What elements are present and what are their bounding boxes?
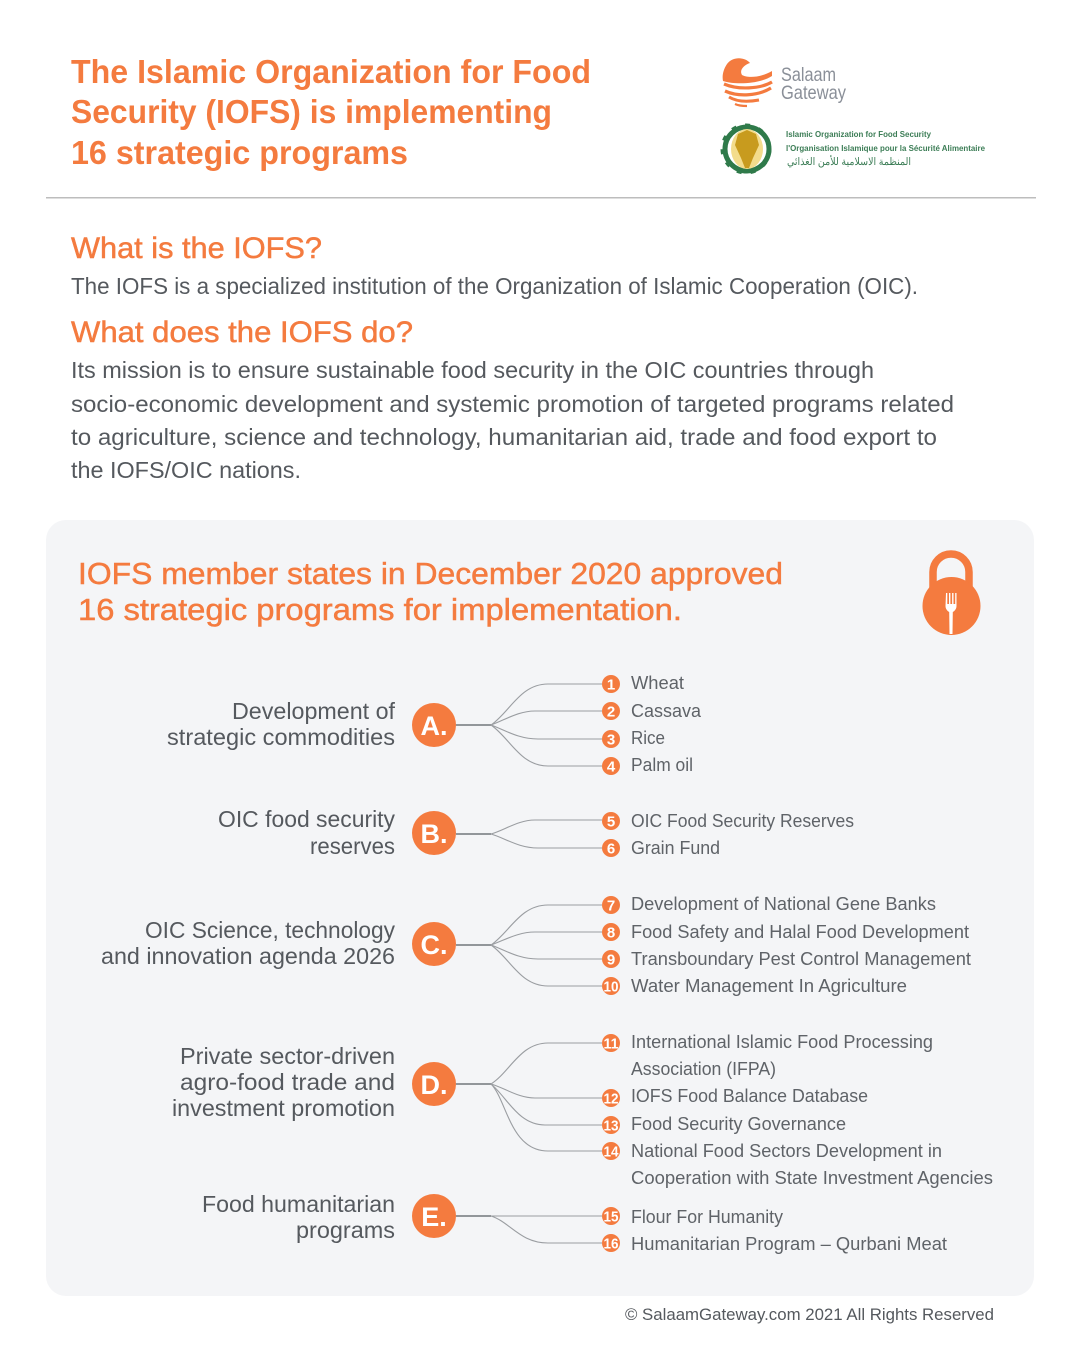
title: 16 strategic programs	[71, 134, 408, 171]
label D: Private sector-driven	[180, 1043, 395, 1069]
group E: food humanitarian programs	[202, 1191, 947, 1254]
label C: and innovation agenda 2026	[101, 943, 395, 969]
items C	[602, 893, 971, 996]
items B: Grain Fund	[631, 837, 720, 858]
badge A	[412, 703, 456, 747]
items E: 15	[604, 1208, 618, 1226]
items C: Transboundary Pest Control Management	[631, 948, 971, 969]
panel heading: IOFS member states in December 2020 approved	[78, 556, 783, 591]
items D: IOFS Food Balance Database	[631, 1085, 868, 1106]
label B: reserves	[310, 833, 395, 859]
items A	[602, 672, 702, 776]
text block: IOFS mission	[71, 357, 954, 483]
badge B	[412, 811, 456, 855]
text block: IOFS mission: to agriculture, science and technology, humanitarian aid, trade and food export to	[71, 424, 937, 450]
label A: strategic commodities	[167, 724, 395, 750]
icon: padlock with fork	[922, 554, 980, 635]
items A: Rice	[631, 727, 665, 748]
label A: Development of	[232, 698, 396, 724]
label D	[172, 1043, 395, 1121]
connectors D	[456, 1043, 602, 1151]
logo: Islamic Organization for Food Security	[722, 125, 985, 173]
label D: agro-food trade and	[180, 1069, 395, 1095]
heading: What does the IOFS do?: What does the IOFS do?	[71, 316, 413, 349]
items C: 9	[607, 952, 615, 968]
panel heading: 16 strategic programs for implementation.	[78, 592, 682, 627]
label D: investment promotion	[172, 1095, 395, 1121]
group D: agro-food trade and investment	[172, 1031, 993, 1188]
items C: 8	[607, 924, 615, 942]
label C: OIC Science, technology	[145, 917, 395, 943]
badge E: E.	[421, 1202, 447, 1232]
items E: Flour For Humanity	[631, 1206, 784, 1227]
text block: IOFS mission: Its mission is to ensure sustainable food security in the OIC countries through	[71, 357, 874, 383]
badge D: D.	[420, 1070, 448, 1100]
label C	[101, 917, 395, 969]
items A: 2	[607, 704, 615, 720]
logo: Islamic Organization for Food Security: l'Organisation Islamique pour la Sécurité Alimentaire	[786, 143, 985, 153]
connectors E	[456, 1216, 602, 1243]
label E	[202, 1191, 395, 1243]
logo: Salaam Gateway	[723, 58, 846, 106]
items C: 7	[607, 898, 615, 914]
logo: Islamic Organization for Food Security: المنظمة الاسلامية للأمن الغذائي	[787, 154, 911, 168]
text block: IOFS mission: the IOFS/OIC nations.	[71, 457, 301, 483]
items A: Wheat	[631, 672, 684, 693]
connectors B	[456, 820, 602, 848]
label B	[218, 806, 395, 859]
badge C	[412, 922, 456, 966]
panel: strategic programs	[46, 520, 1034, 1296]
badge E	[412, 1194, 456, 1238]
items A: 1	[607, 676, 615, 694]
items D	[602, 1031, 993, 1188]
items D: 14	[604, 1144, 619, 1160]
items D: Association (IFPA)	[631, 1058, 776, 1079]
badge B: B.	[420, 819, 448, 849]
items B	[602, 810, 854, 858]
items D: National Food Sectors Development in	[631, 1140, 942, 1161]
items E: 16	[604, 1236, 618, 1252]
label A	[167, 698, 396, 750]
items A: Palm oil	[631, 754, 693, 775]
group A: strategic commodities	[167, 672, 702, 776]
items A: 3	[607, 732, 615, 748]
label E: programs	[296, 1217, 395, 1243]
logo: Islamic Organization for Food Security: Islamic Organization for Food Security	[786, 129, 931, 139]
badge C: C.	[420, 930, 448, 960]
connectors C	[456, 905, 602, 986]
badge D	[412, 1062, 456, 1106]
label B: OIC food security	[218, 806, 395, 832]
items E	[602, 1206, 947, 1254]
divider	[46, 197, 1036, 198]
items D: 12	[604, 1090, 618, 1108]
text block: IOFS definition: The IOFS is a specialized institution of the Organization of Islamic Cooperation (OIC).	[71, 273, 918, 299]
label E: Food humanitarian	[202, 1191, 395, 1217]
text block: IOFS mission: socio-economic development and systemic promotion of targeted programs related	[71, 391, 954, 417]
items D: International Islamic Food Processing	[631, 1031, 933, 1052]
copyright: © SalaamGateway.com 2021 All Rights Reserved	[625, 1305, 994, 1324]
heading: What is the IOFS?: What is the IOFS?	[71, 232, 322, 265]
items B: 5	[607, 814, 615, 830]
items D: Cooperation with State Investment Agencies	[631, 1167, 993, 1188]
items D: Food Security Governance	[631, 1113, 846, 1134]
items C: Food Safety and Halal Food Development	[631, 921, 969, 942]
items D: 13	[604, 1118, 618, 1134]
title	[71, 53, 591, 171]
items B: OIC Food Security Reserves	[631, 810, 854, 831]
items A: 4	[607, 758, 616, 776]
items C: Water Management In Agriculture	[631, 975, 907, 996]
connectors A	[456, 684, 602, 766]
items C: 10	[604, 978, 618, 996]
badge A: A.	[420, 711, 448, 741]
items A: Cassava	[631, 700, 702, 721]
logo: Salaam Gateway: Salaam	[781, 64, 836, 86]
group B: food security reserves	[218, 806, 854, 859]
panel heading	[78, 556, 783, 627]
items D: 11	[604, 1036, 618, 1052]
title: The Islamic Organization for Food	[71, 53, 591, 90]
items B: 6	[607, 840, 615, 858]
items C: Development of National Gene Banks	[631, 893, 936, 914]
title: Security (IOFS) is implementing	[71, 93, 552, 130]
logo: Salaam Gateway: Gateway	[781, 82, 846, 104]
group C: science, technology and innovation	[101, 893, 971, 996]
items E: Humanitarian Program – Qurbani Meat	[631, 1233, 947, 1254]
